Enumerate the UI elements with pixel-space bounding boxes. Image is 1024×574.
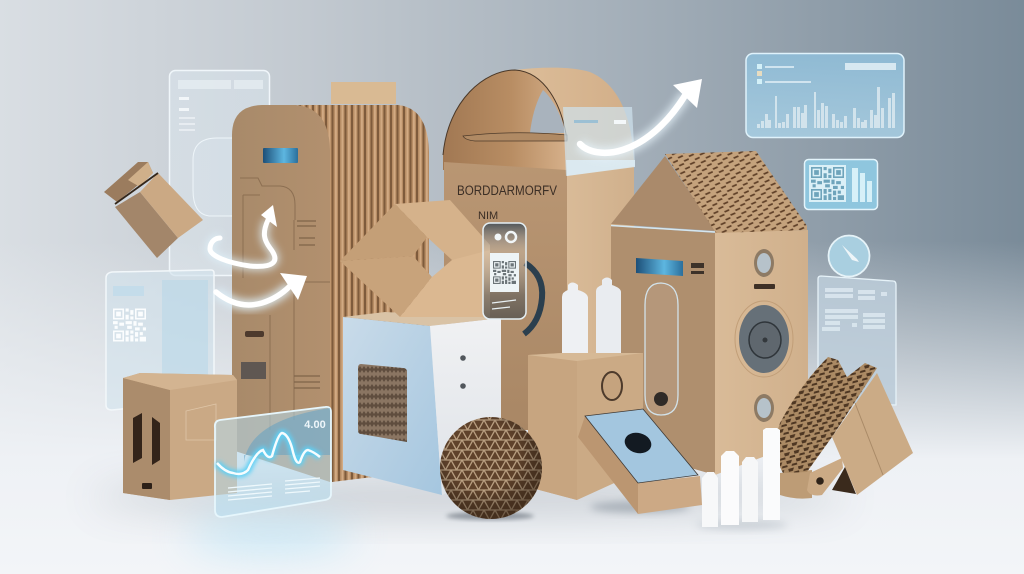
printed label: BORDDARMORFV — [457, 183, 557, 198]
bottom left box — [123, 373, 237, 500]
glass arch outline — [645, 283, 678, 415]
body side — [565, 165, 634, 420]
blue slot — [263, 148, 298, 163]
front face — [232, 105, 330, 482]
arch interior — [443, 70, 567, 172]
mesh sphere — [440, 417, 542, 520]
tall corrugated box — [232, 82, 429, 482]
panel: glass QR document — [106, 270, 214, 410]
blue tile wedge — [578, 409, 702, 514]
printed label small: NIM — [478, 210, 498, 222]
panel: tall glass document — [170, 70, 270, 276]
printed lines — [240, 178, 330, 430]
round port — [654, 392, 668, 406]
blue white box — [343, 312, 501, 495]
hole showing background — [530, 90, 565, 133]
panel: glass card on arch — [563, 107, 635, 176]
blue slot — [636, 258, 683, 276]
panel: glowing line chart — [215, 407, 331, 517]
small box with ring — [528, 353, 643, 500]
speaker — [735, 301, 793, 377]
house box — [611, 151, 808, 475]
inner shelf — [463, 133, 567, 141]
open carton — [340, 200, 490, 317]
top tab — [331, 82, 396, 104]
arch band — [515, 68, 634, 172]
side face — [715, 230, 808, 475]
panel: glass document right — [818, 276, 896, 405]
white bottles — [562, 278, 621, 356]
floating box — [104, 162, 203, 258]
panel: top right chart — [746, 54, 904, 138]
panel: glass QR tag with strap — [483, 223, 542, 334]
front wall — [611, 226, 715, 475]
arrows: swirl on tall box — [210, 205, 307, 305]
panel: QR and bars — [804, 160, 878, 210]
arch box — [443, 68, 634, 430]
arrow: rising glowing arrow — [580, 79, 702, 153]
white pillars — [696, 428, 788, 530]
gable — [611, 156, 716, 231]
top lens — [754, 249, 774, 277]
corrugated cut object — [776, 357, 913, 499]
bottom lens — [754, 394, 774, 422]
icon: clock — [828, 236, 870, 276]
corrugated side ribs — [298, 105, 429, 482]
corrugated roof — [665, 151, 807, 233]
value label: 4.00 — [304, 419, 326, 431]
body front — [444, 162, 567, 430]
